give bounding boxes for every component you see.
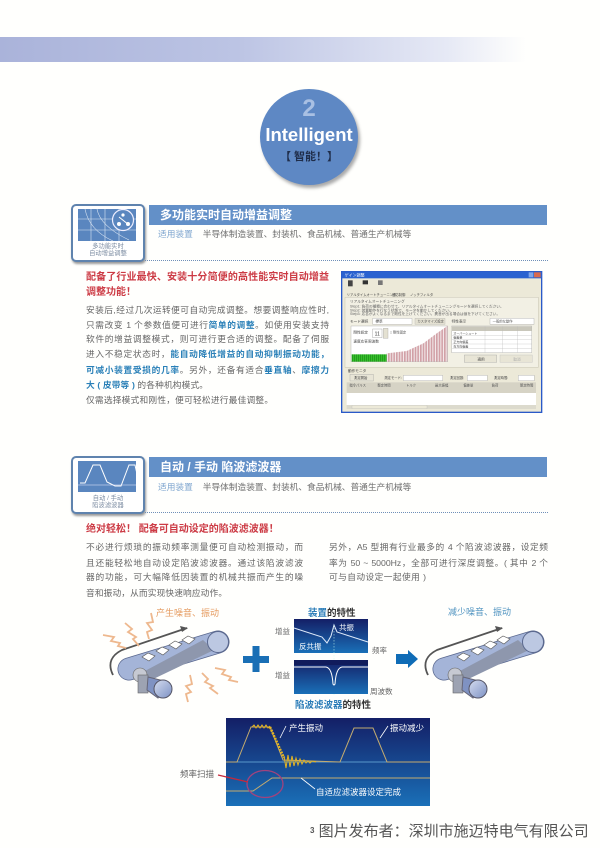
section 2 header bar	[149, 457, 547, 477]
stiffness bar chart: 剛性設定	[353, 330, 368, 335]
software screenshot: 測定モード:	[384, 375, 402, 380]
software screenshot: モード選択	[350, 318, 369, 323]
software screenshot: 測定時間:	[494, 375, 508, 380]
device characteristic chart: 装置的特性	[308, 607, 356, 619]
frequency sweep label: 频率扫描	[180, 769, 215, 779]
notch filter characteristic chart: 陷波滤波器的特性	[295, 699, 372, 711]
software screenshot: Step2: 装置動作を行なう状態で、モータを動かしてください。	[350, 307, 453, 312]
notch filter characteristic chart: 周波数	[370, 686, 393, 696]
section 2 left text: 器的功能，可大幅降低因装置的机械共振而产生的噪	[86, 572, 303, 582]
left conveyor with noise	[103, 607, 238, 702]
software screenshot: 偏差量	[463, 382, 474, 387]
section 1 text block: 可减小装置受损的几率。另外，还备有适合垂直轴、摩擦力	[86, 365, 329, 375]
badge: Intelligent circle	[260, 89, 358, 185]
software screenshot: Step3: 応答がよくなるまで剛性を上げてください。異音が出る場合は値を下げてください。	[350, 311, 500, 316]
section 2 right text: 另外，A5 型拥有行业最多的 4 个陷波滤波器，设定频	[329, 542, 548, 552]
left conveyor with noise: 产生噪音、振动	[156, 607, 219, 618]
vibration waveform chart: 振动减少	[390, 723, 425, 733]
icon: notch filter: 自动 / 手动	[93, 495, 123, 502]
device characteristic chart: 反共振	[299, 641, 322, 651]
device characteristic chart	[275, 607, 387, 695]
vibration waveform chart: 自适应滤波器设定完成	[316, 787, 402, 797]
badge: Intelligent circle: Intelligent	[265, 124, 353, 145]
section 2 heading: 绝对轻松！ 配备可自动设定的陷波滤波器！	[86, 524, 279, 535]
section 2 left text	[86, 542, 303, 598]
software screenshot	[341, 271, 542, 413]
software screenshot: 正方向偏差	[453, 339, 468, 344]
software screenshot: Step1: 負荷の種類に合わせて、リアルタイムオートチューニングモードを選択してください。	[350, 304, 504, 309]
section 1 text block: 只需改变 1 个参数值便可进行简单的调整。如使用安装支持	[86, 320, 329, 330]
software screenshot: カスタマイズ設定	[417, 319, 445, 324]
software screenshot: 適応制御	[392, 292, 406, 297]
device characteristic chart: 频率	[372, 645, 387, 655]
badge: Intelligent circle: 【 智能！】	[280, 151, 338, 163]
software screenshot: 適用	[477, 356, 485, 361]
software screenshot: 負方向偏差	[453, 343, 468, 348]
software screenshot: 一般的な動作	[493, 319, 513, 324]
section 2 left text: 音和振动，从而实现快速响应动作。	[86, 588, 227, 598]
software screenshot: 負荷	[492, 382, 499, 387]
software screenshot: オーバーシュート	[453, 330, 477, 335]
frequency sweep label	[180, 769, 248, 782]
right conveyor with reduced noise: 减少噪音、振动	[448, 606, 511, 617]
stiffness bar chart: 11	[375, 331, 380, 337]
software screenshot: 特性表示	[452, 318, 467, 323]
section 1 header bar: 多功能实时自动增益调整	[160, 208, 292, 222]
device characteristic chart: 增益	[275, 626, 290, 636]
vibration waveform chart: 产生振动	[289, 723, 324, 733]
section 1 text block: 仅需选择模式和刚性，便可轻松进行最佳调整。	[86, 395, 273, 405]
software screenshot: ゲイン調整	[345, 272, 365, 278]
software screenshot: 最大振幅	[435, 382, 449, 387]
section 2 right text: 可与自动设定一起使用 )	[329, 572, 426, 582]
footer publisher credit: 3 图片发布者：深圳市施迈特电气有限公司	[310, 823, 589, 840]
section 1 text block: 大 ( 皮带等 ) 的各种机构模式。	[86, 380, 208, 390]
section 2 left text: 不必进行烦琐的振动频率测量便可自动检测振动，而	[86, 542, 303, 552]
vibration waveform chart	[226, 718, 430, 806]
badge: Intelligent circle: 2	[302, 95, 316, 122]
section 1 header bar	[149, 205, 547, 225]
section 2 applicable equipment: 适用装置 半导体制造装置、封装机、食品机械、普通生产机械等	[158, 482, 411, 492]
icon: auto gain tuning	[71, 204, 145, 262]
plus sign	[243, 646, 269, 672]
top gradient band	[0, 37, 526, 62]
icon: notch filter	[71, 456, 145, 514]
section 1 applicable equipment: 适用装置 半导体制造装置、封装机、食品机械、普通生产机械等	[158, 229, 411, 239]
section 2 right text: 率为 50 ~ 5000Hz，全部可进行深度调整。( 其中 2 个	[329, 558, 548, 568]
software screenshot: 整定時間	[520, 382, 534, 387]
notch filter characteristic chart: 增益	[275, 670, 290, 680]
section 1 text block: 进入不稳定状态时，能自动降低增益的自动抑制振动功能，	[86, 349, 329, 359]
stiffness bar chart: 速度応答周波数	[353, 338, 379, 343]
section 1 text block: 配备了行业最快、安装十分简便的高性能实时自动增益	[86, 272, 329, 283]
section 2 header bar: 自动 / 手动 陷波滤波器	[160, 460, 281, 474]
icon: notch filter: 陷波滤波器	[92, 502, 124, 509]
stiffness bar chart	[351, 326, 448, 362]
software screenshot: 測定開始	[354, 375, 368, 380]
software screenshot: 取消	[513, 356, 521, 361]
stiffness bar chart: □ 剛性固定	[390, 330, 407, 335]
section 1 text block: 安装后,经过几次运转便可自动完成调整。想要调整响应性时,	[86, 305, 329, 315]
software screenshot: 測定回数:	[450, 375, 464, 380]
right conveyor with reduced noise	[425, 606, 544, 698]
device characteristic chart: 共振	[339, 622, 354, 632]
section 1 text block: 调整功能！	[86, 287, 136, 298]
software screenshot: トルク	[406, 382, 416, 387]
section 1 text block: 软件的增益调整模式，则可进行更合适的调整。配备了伺服	[86, 334, 329, 344]
software screenshot: リアルタイムオートチューニング	[350, 298, 405, 303]
software screenshot: リアルタイムオートチューニング	[347, 292, 397, 297]
software screenshot: 偏差量	[453, 335, 462, 340]
software screenshot: 標準	[375, 319, 383, 324]
section 2 left text: 且还能轻松地自动设定陷波滤波器。通过该陷波滤波	[86, 558, 303, 568]
arrow to result	[396, 650, 418, 668]
icon: auto gain tuning: 多功能实时	[92, 243, 124, 250]
section 1 text block	[86, 271, 329, 405]
notch filter characteristic chart	[275, 660, 393, 711]
software screenshot: ノッチフィルタ	[410, 292, 433, 297]
software screenshot: 整定時間	[377, 382, 391, 387]
section 2 right text	[329, 542, 548, 582]
software screenshot: 動作モニタ	[348, 368, 367, 373]
software screenshot: 指令パルス	[349, 382, 366, 387]
icon: auto gain tuning: 自动增益调整	[89, 250, 127, 257]
